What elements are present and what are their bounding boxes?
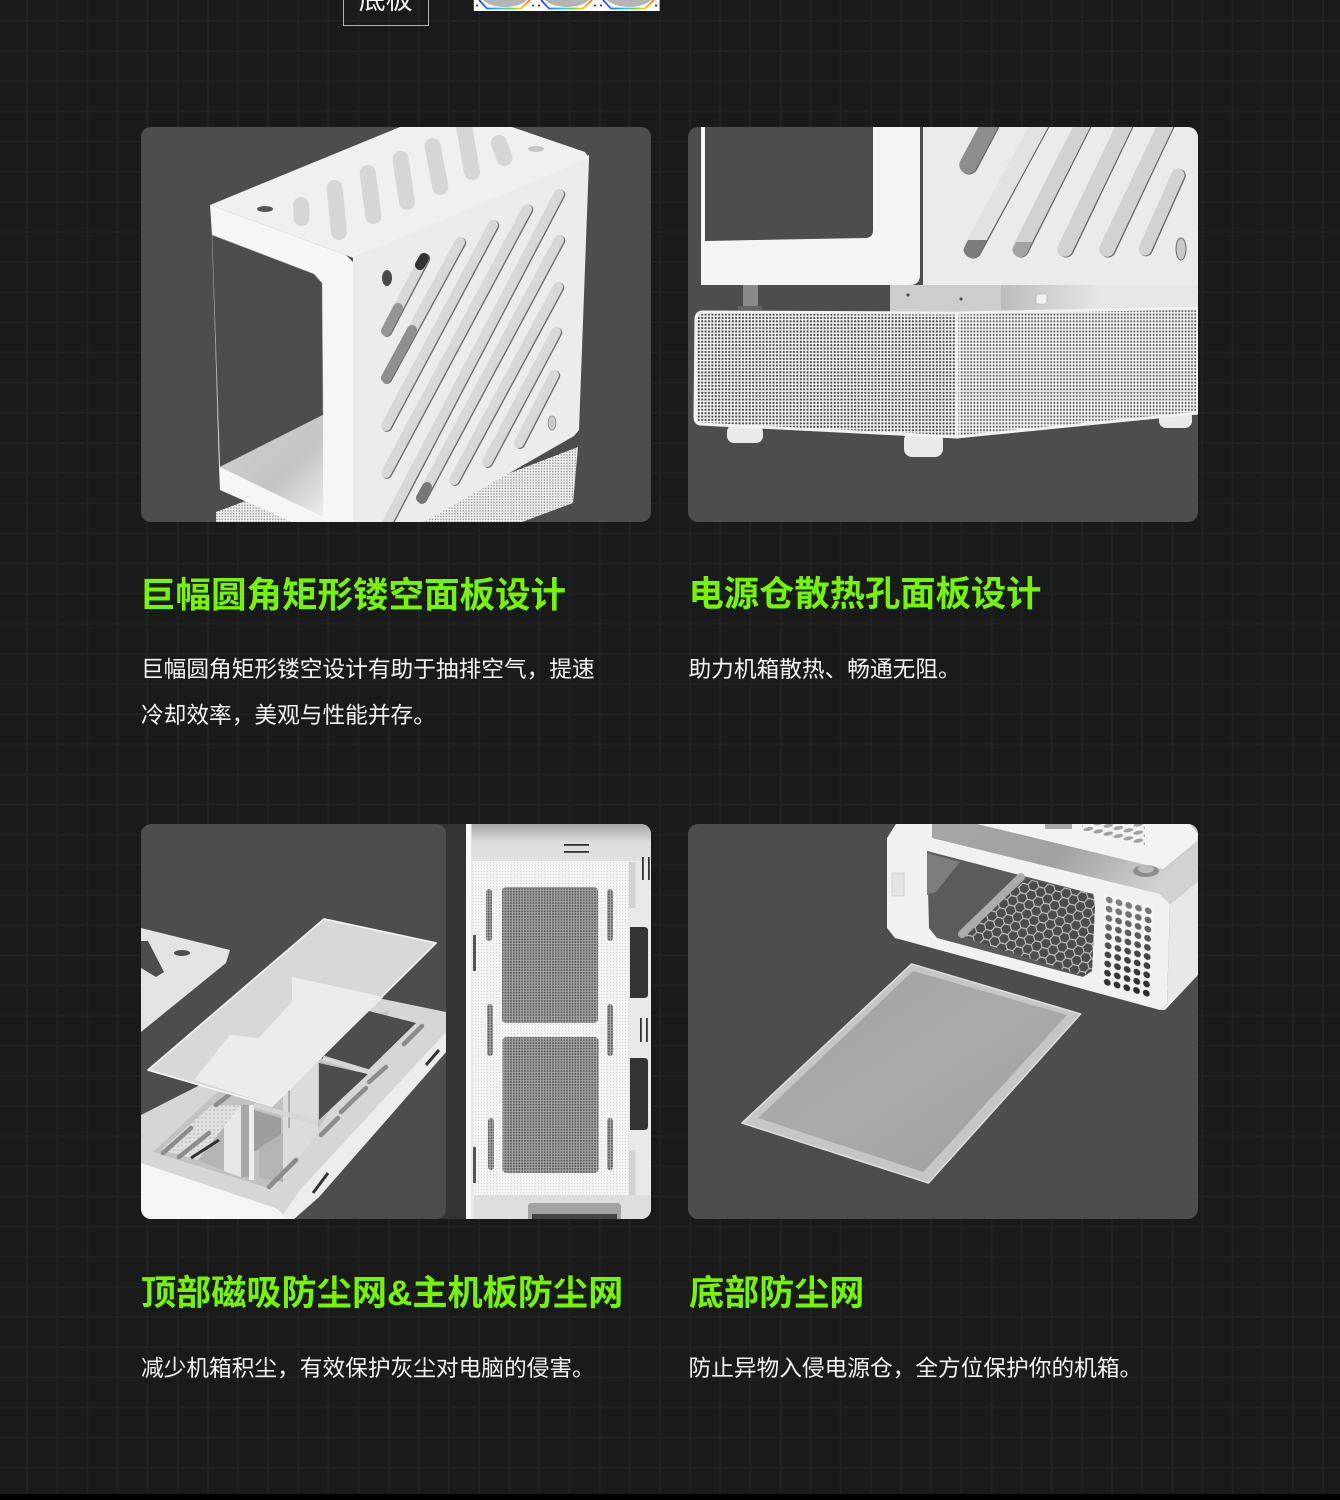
case body bbox=[887, 824, 1170, 1010]
side diagonal slots bbox=[386, 194, 559, 525]
light outer rim bbox=[280, 1032, 446, 1219]
upper case underside bbox=[977, 824, 1198, 869]
foot bbox=[1133, 865, 1159, 877]
vent hole bbox=[1176, 238, 1186, 260]
case: top face bbox=[210, 127, 589, 258]
side curved face bbox=[1160, 881, 1198, 1010]
slot bottoms bbox=[963, 240, 1032, 258]
side holes bbox=[382, 270, 556, 430]
panel: PSU vent panel photo bbox=[688, 127, 1198, 522]
hex mesh bbox=[962, 879, 1095, 976]
base: right mesh face bbox=[957, 308, 1198, 437]
exploded view bbox=[141, 824, 446, 1219]
text: left top feature: 冷却效率，美观与性能并存。 bbox=[141, 702, 436, 728]
front white wall bbox=[141, 1163, 284, 1219]
panel: top and motherboard dust filters photo bbox=[141, 824, 651, 1219]
vent dot grid bbox=[1102, 894, 1153, 999]
top slots bbox=[301, 120, 504, 232]
recess bbox=[153, 1010, 390, 1188]
top holes bbox=[257, 146, 544, 212]
left edge clips bbox=[473, 935, 476, 1183]
side mesh strips bbox=[486, 889, 613, 1170]
top plate bbox=[141, 928, 230, 1032]
feet bbox=[727, 410, 1192, 457]
side wall notches bbox=[630, 927, 648, 1130]
case: front frame bbox=[701, 127, 920, 285]
inner rail bbox=[962, 877, 1021, 934]
side diagonal slots shadow bbox=[387, 195, 560, 526]
interior walls bbox=[198, 1062, 318, 1182]
text: left top feature: 巨幅圆角矩形镂空设计有助于抽排空气，提速 bbox=[141, 656, 595, 682]
vent slots bbox=[968, 120, 1179, 250]
text: right bottom feature: 防止异物入侵电源仓，全方位保护你的机箱。 bbox=[688, 1355, 1142, 1381]
footer bar bbox=[0, 1494, 1340, 1500]
PSU opening bbox=[927, 851, 1095, 977]
frame windows bbox=[319, 1007, 416, 1120]
window bbox=[705, 127, 873, 241]
upper case dots bbox=[1082, 824, 1145, 846]
clip marks bbox=[564, 844, 650, 1042]
frame slots bbox=[163, 1026, 422, 1187]
panel: hollow side panel photo bbox=[141, 127, 651, 522]
perforated floor bbox=[161, 1105, 240, 1160]
filter overlap highlight bbox=[194, 977, 384, 1105]
text: right top feature: 助力机箱散热、畅通无阻。 bbox=[688, 656, 961, 682]
label: base plate tag bbox=[343, 0, 428, 26]
case: side panel bbox=[353, 155, 589, 522]
dark mesh upper bbox=[502, 887, 598, 1023]
mesh door view bbox=[466, 824, 652, 1219]
bottom section bbox=[474, 1195, 651, 1219]
dark slits bbox=[191, 1050, 439, 1193]
floating dust filter bbox=[148, 919, 436, 1106]
text: left top feature bbox=[141, 656, 595, 728]
side mesh through opening bbox=[927, 853, 960, 895]
heading: right top feature: 电源仓散热孔面板设计 bbox=[688, 575, 1041, 614]
gap between upper and lower body bbox=[932, 824, 1198, 904]
hinges bbox=[629, 862, 636, 1195]
heading: right bottom feature: 底部防尘网 bbox=[689, 1274, 864, 1313]
mesh plate bbox=[472, 861, 629, 1195]
window floor bbox=[220, 415, 323, 517]
case: right panel bbox=[923, 127, 1198, 285]
slot inner dark parts bbox=[386, 258, 427, 498]
small handle bbox=[892, 873, 904, 896]
heading: left top feature: 巨幅圆角矩形镂空面板设计 bbox=[140, 575, 566, 615]
case frame bbox=[141, 997, 446, 1219]
glass edge bbox=[702, 127, 704, 241]
support post and plates bbox=[738, 285, 1198, 314]
dark mesh lower bbox=[502, 1037, 598, 1173]
base mesh pieces bbox=[216, 447, 578, 522]
frame cross bars bbox=[254, 1058, 369, 1123]
top plate cutouts bbox=[141, 941, 190, 977]
filter frame bbox=[742, 964, 1081, 1183]
case: front frame bbox=[210, 205, 353, 522]
bottom handle bbox=[528, 1203, 621, 1219]
window glass bbox=[212, 235, 323, 467]
thumbnail: RGB fans strip bbox=[474, 0, 660, 11]
upper case slot bbox=[1045, 824, 1072, 829]
text: left bottom feature: 减少机箱积尘，有效保护灰尘对电脑的侵害。 bbox=[141, 1355, 595, 1381]
filter mesh bbox=[758, 971, 1067, 1172]
heading: left bottom feature: 顶部磁吸防尘网&主机板防尘网 bbox=[141, 1274, 623, 1313]
panel: bottom dust filter photo bbox=[688, 824, 1198, 1219]
base: left mesh face bbox=[695, 312, 957, 437]
